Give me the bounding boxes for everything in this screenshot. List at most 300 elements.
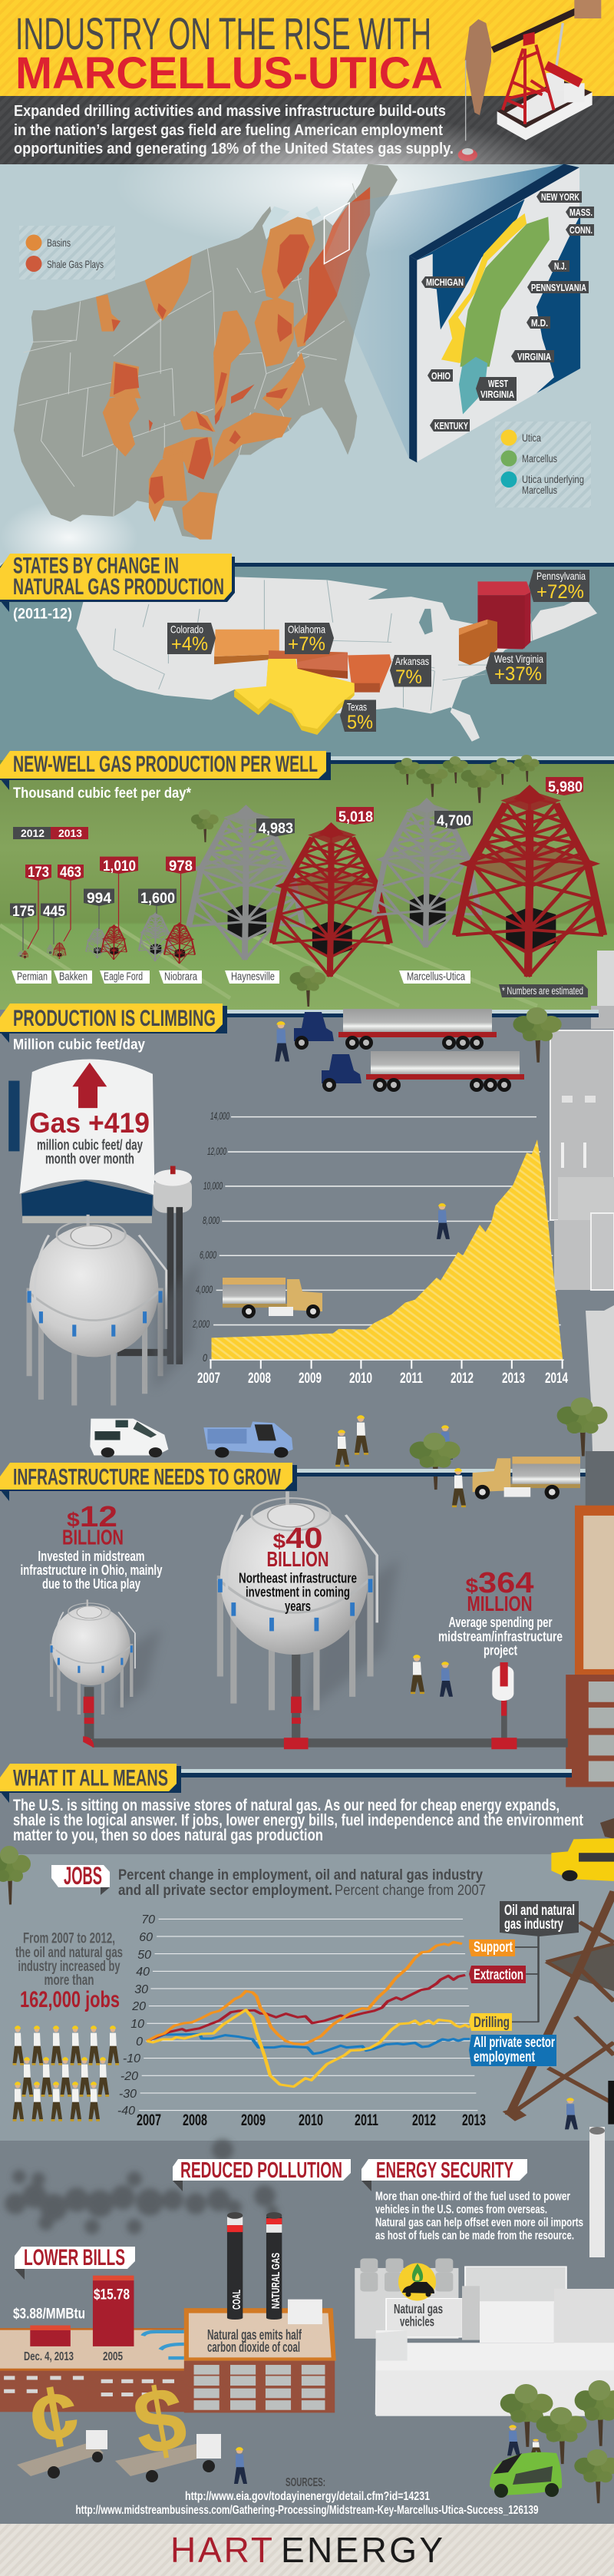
chart year labels: 2008: [183, 2111, 207, 2129]
white column: stack: [589, 2127, 605, 2257]
note: numbers are estimated: [499, 984, 588, 997]
inset: Utica underlying Marcellus: [459, 357, 487, 415]
tag: Pennsylvania +72%: [529, 570, 589, 603]
chart year labels: 2012: [412, 2111, 436, 2129]
chart axis labels: 10,000: [203, 1179, 223, 1192]
legend: basins and shale plays: Shale Gas Plays: [47, 258, 104, 270]
shelter: navy base: [21, 1181, 153, 1218]
chart axis labels: 50: [137, 1949, 151, 1962]
tag: Colorado +4%: Colorado: [170, 623, 203, 636]
inset place labels: [421, 191, 594, 432]
label: jobs: [51, 1862, 110, 1895]
building: processing plant right side: [550, 1006, 614, 1457]
tag: oil and natural gas industry: [500, 1901, 579, 1936]
series: orange support: [147, 1942, 462, 2045]
tag: Texas 5%: [340, 700, 376, 733]
stat: $40 billion: Northeast infrastructure: [239, 1570, 357, 1586]
chart axis labels: 0: [136, 2035, 143, 2049]
chart axis labels: 6,000: [200, 1248, 216, 1261]
stat: 162,000 jobs: more than: [45, 1973, 94, 1989]
icon group: workers: [13, 2025, 119, 2121]
stat: $12 billion: $12: [67, 1501, 117, 1533]
building corner on grass: [597, 951, 614, 1010]
chart year labels: 2011: [400, 1371, 423, 1387]
note: numbers are estimated: * Numbers are estimated: [502, 985, 583, 997]
name labels: gas plays: Marcellus-Utica: [407, 971, 466, 983]
tag: oil and natural gas industry: gas industry: [504, 1916, 563, 1933]
chart year labels: 2008: [248, 1371, 271, 1387]
stat: $40 billion: $40: [273, 1523, 322, 1555]
factory note: Natural gas emits half: [207, 2327, 302, 2343]
tag: Oklahoma +7%: Oklahoma: [288, 623, 325, 636]
worker on chart: [437, 1203, 450, 1239]
icon: natural gas vehicle badge: [398, 2264, 436, 2300]
section rule: states: [230, 563, 614, 567]
chart axis labels: 70: [141, 1913, 155, 1926]
name labels: gas plays: Permian: [17, 971, 48, 983]
legend: inset: Marcellus: [522, 484, 557, 496]
block: Arkansas: [348, 654, 391, 693]
header: yellow title band: [0, 0, 614, 96]
shelter: white roof: [20, 1060, 155, 1195]
value tags: well production: 4,983: [259, 821, 293, 837]
chart year labels: 2012: [451, 1371, 474, 1387]
inset place labels: M.D.: [531, 317, 548, 329]
series: yellow drilling: [147, 2010, 470, 2087]
bill labels: $15.78: [94, 2287, 130, 2303]
tag: oil and natural gas industry: Oil and natural: [504, 1903, 575, 1919]
trees on lot: [410, 1397, 608, 1490]
section rule: production: [227, 1010, 599, 1017]
tag: Extraction: [469, 1966, 526, 1983]
tank: $12 billion: [51, 1599, 135, 1715]
stat: 162,000 jobs: the oil and natural gas: [15, 1945, 123, 1961]
map: states change in gas production: [76, 577, 597, 742]
derrick: Marcellus-Utica 2013: [456, 785, 603, 977]
legend: years: [13, 827, 88, 839]
shelter: equipment column: [8, 1081, 20, 1151]
chart axis labels: 10: [130, 2018, 144, 2031]
grass road markings: [0, 925, 537, 1006]
banner: infrastructure needs to grow: INFRASTRUCTURE NEEDS TO GROW: [13, 1465, 281, 1490]
icon: pump jack: [458, 0, 601, 161]
paragraph: what it all means: [13, 1797, 583, 1844]
inset: Marcellus area: [460, 217, 550, 367]
block: Colorado: [214, 630, 279, 664]
stat: $364 million: midstream/infrastructure: [438, 1629, 563, 1645]
people near car: [507, 2425, 542, 2455]
derrick: Permian 2012: [18, 951, 24, 957]
label: jobs: JOBS: [64, 1862, 102, 1890]
map: US land: [14, 164, 398, 540]
tag: West Virginia +37%: West Virginia: [494, 653, 543, 665]
stat: $40 billion: investment in coming: [246, 1585, 350, 1600]
legend: years: 2013: [58, 827, 82, 839]
footer logo: Hart Energy: [170, 2530, 443, 2570]
tree: upper left of jobs panel: [0, 1846, 31, 1904]
sources: [75, 2476, 539, 2517]
vehicle: white van: [90, 1419, 168, 1457]
icon: cent truck: [17, 2365, 107, 2478]
inset place labels: VIRGINIA: [480, 389, 514, 400]
heading: percent change: Percent change in employment, oil and natural gas industry: [118, 1867, 483, 1883]
trees lower right: [500, 2380, 614, 2503]
chart axis labels: [117, 1913, 155, 2118]
vehicle: blue pickup: [203, 1421, 293, 1458]
banner: energy security: ENERGY SECURITY: [376, 2158, 513, 2183]
value tags: well production: 5,018: [338, 809, 373, 825]
factory: low wing: [0, 2369, 186, 2412]
inset: Utica area: [441, 213, 527, 363]
chart axis labels: 0: [203, 1351, 207, 1364]
name labels: gas plays: Eagle Ford: [104, 971, 143, 983]
sources: http://www.eia.gov/todayinenergy/detail.cfm?id=14231: [185, 2490, 430, 2503]
footer band: [0, 2524, 614, 2576]
gas plus 419 shelter and plant: [8, 1060, 192, 1364]
value tags: well production: 445: [43, 904, 65, 920]
map: United States with basins and shale plays: [14, 164, 398, 540]
tag: All private sector: [469, 2035, 556, 2066]
inset place labels: NEW YORK: [541, 191, 579, 203]
chart axis labels: 8,000: [203, 1214, 220, 1226]
vehicle: yellow taxi: [551, 1838, 614, 1881]
tag: All private sector: All private sector: [474, 2035, 555, 2051]
banner: states by change: STATES BY CHANGE IN: [13, 554, 179, 579]
building: white plant: [355, 2258, 614, 2416]
stack labels: COAL: [230, 2290, 243, 2310]
derrick: Eagle Ford 2012: [86, 928, 109, 958]
tag: Arkansas 7%: Arkansas: [395, 655, 429, 667]
chart: monthly gas production, area chart: [210, 1117, 564, 1369]
stat: 162,000 jobs: 162,000 jobs: [20, 1987, 120, 2012]
tag: Pennsylvania +72%: Pennsylvania: [536, 570, 586, 582]
tank: $364 million small vessel: [492, 1662, 513, 1701]
chart year labels: 2011: [355, 2111, 378, 2129]
stack labels: NATURAL GAS: [269, 2253, 282, 2309]
map background glow: [0, 115, 576, 576]
tag: Arkansas 7%: [390, 655, 431, 688]
tag: Pennsylvania +72%: +72%: [536, 581, 584, 603]
derrick: Haynesville 2012: [189, 805, 303, 960]
stat: $12 billion: due to the Utica play: [42, 1576, 140, 1592]
stat: $40 billion: years: [285, 1599, 311, 1614]
legend: inset: Utica: [522, 432, 541, 444]
chart year labels: 2014: [545, 1371, 568, 1387]
truck: yellow tanker mirrored: [473, 1457, 580, 1500]
label: natural gas vehicles: vehicles: [400, 2314, 434, 2330]
map: white US outline: [76, 577, 597, 742]
stat: $40 billion: [239, 1523, 357, 1614]
stat: $12 billion: [20, 1501, 163, 1592]
tag: Extraction: Extraction: [474, 1967, 523, 1983]
subtitle: units: Million cubic feet/day: [13, 1037, 145, 1053]
tag: Texas 5%: Texas: [347, 700, 367, 713]
derrick: Niobrara 2012: [139, 912, 172, 961]
chart axis labels: 20: [131, 2000, 146, 2013]
banner: what it all means: [0, 1764, 181, 1803]
banner: states by change: [0, 554, 235, 612]
name labels: gas plays: [12, 971, 470, 984]
chart axis labels: 2,000: [192, 1318, 210, 1330]
value tags: well production: 463: [60, 865, 81, 881]
inset place labels: CONN.: [569, 224, 593, 236]
tower: brown derrick on right: [503, 1891, 614, 2125]
chart axis labels: 60: [139, 1931, 153, 1944]
bill labels: $3.88/MMBtu: [13, 2306, 85, 2322]
section rule: new-well production: [326, 756, 614, 764]
value tags: well production: 978: [169, 858, 193, 875]
tag: West Virginia +37%: +37%: [494, 663, 542, 685]
sign: Gas +419: [29, 1107, 150, 1167]
building: brick factory with stacks: [0, 2212, 336, 2412]
pipes: [170, 1207, 180, 1364]
banner: reduced pollution: REDUCED POLLUTION: [180, 2158, 342, 2183]
derrick: Eagle Ford 2013: [101, 924, 127, 960]
name labels: gas plays: Haynesville: [231, 971, 275, 983]
chart year labels: [197, 1371, 568, 1387]
stat: 162,000 jobs: industry increased by: [18, 1959, 120, 1975]
block: Pennsylvania: [477, 581, 530, 650]
map: shale gas plays: [111, 187, 370, 504]
bill labels: 2005: [103, 2350, 123, 2363]
bar: 2005 price: [93, 2276, 134, 2346]
icon: cent truck: ¢: [22, 2365, 86, 2468]
block: West Virginia: [459, 620, 497, 665]
chart year labels: 2009: [299, 1371, 322, 1387]
worker beneath tower: [565, 2098, 578, 2129]
chart axis labels: -20: [120, 2070, 138, 2083]
banner: new-well gas production: [0, 751, 331, 790]
worker in red vest: [275, 1021, 289, 1062]
smoke: [5, 2139, 279, 2234]
derrick: Bakken 2013: [53, 942, 66, 959]
tag: Drilling: Drilling: [474, 2015, 510, 2031]
icon: dollar truck: [115, 2367, 221, 2482]
footer logo: Hart Energy: HART: [170, 2530, 272, 2570]
chart axis labels: 14,000: [210, 1109, 229, 1122]
subtitle: units: Thousand cubic feet per day*: [13, 785, 192, 802]
derrick: Permian 2013: [21, 951, 28, 959]
chart axis labels: [192, 1109, 229, 1364]
chart year labels: 2009: [241, 2111, 266, 2129]
inset place labels: N.J.: [554, 260, 566, 272]
chart axis labels: 30: [134, 1983, 148, 1996]
intro text: [14, 103, 454, 157]
series: blue all private: [147, 2034, 470, 2054]
chart year labels: 2010: [349, 1371, 372, 1387]
arrow: increase: [72, 1063, 107, 1108]
intro text: Expanded drilling activities and massive infrastructure build-outs: [14, 103, 446, 120]
stat: 162,000 jobs: [15, 1931, 123, 2012]
derrick: Niobrara 2013: [164, 922, 195, 964]
small white tank: [154, 1166, 192, 1213]
legend: years: 2012: [21, 827, 45, 839]
banner: what it all means: WHAT IT ALL MEANS: [13, 1766, 168, 1791]
tag: West Virginia +37%: [486, 653, 546, 685]
map: basins: [96, 217, 315, 540]
bar: Dec 4 2013 price: [30, 2326, 71, 2346]
value tags: well production: 175: [12, 904, 35, 920]
stack: natural gas: [266, 2212, 282, 2320]
stat: $12 billion: Invested in midstream: [38, 1549, 144, 1564]
heading: percent change: Percent change from 2007: [335, 1883, 486, 1899]
intro text: in the nation’s largest gas field are fueling American employment: [14, 122, 443, 139]
inset place labels: WEST: [488, 378, 508, 389]
chart axis labels: 40: [136, 1966, 150, 1979]
tag: Texas 5%: 5%: [347, 712, 373, 733]
footer logo: Hart Energy: ENERGY: [281, 2530, 443, 2570]
banner: energy security: [361, 2158, 527, 2191]
inset place labels: MASS.: [569, 207, 593, 218]
subtitle: years: (2011-12): [13, 607, 72, 623]
legend: basins and shale plays: [19, 226, 115, 279]
factory: blue pipes: [143, 2332, 184, 2358]
chart: employment line chart: [139, 1919, 539, 2111]
value tags: well production: 4,700: [437, 813, 471, 829]
stat: $364 million: project: [484, 1643, 517, 1658]
inset place labels: MICHIGAN: [426, 276, 464, 288]
derrick: Bakken 2012: [47, 944, 54, 955]
tag: All private sector: employment: [474, 2049, 535, 2065]
banner: lower bills: [15, 2245, 135, 2280]
chart year labels: 2007: [137, 2111, 161, 2129]
name labels: gas plays: Bakken: [59, 971, 87, 983]
paragraph: what it all means: matter to you, then so does natural gas production: [13, 1827, 323, 1844]
chart year labels: [137, 2111, 486, 2129]
section rule: infrastructure: [296, 1469, 606, 1476]
inset map: Marcellus-Utica region: [409, 164, 580, 462]
worker near trucks: [234, 2447, 247, 2484]
stack labels: [230, 2253, 282, 2310]
tag: Support: Support: [474, 1939, 513, 1956]
tag: Colorado +4%: [167, 623, 216, 655]
truck: tanker 1: [294, 1009, 497, 1050]
tag: Support: [469, 1939, 515, 1956]
icon: dollar truck: $: [126, 2367, 193, 2475]
building: brick block with roof: [566, 1451, 614, 1787]
banner: lower bills: LOWER BILLS: [24, 2245, 125, 2270]
chart year labels: 2013: [502, 1371, 525, 1387]
chart axis labels: -40: [117, 2105, 135, 2118]
header: dark intro band: [0, 96, 614, 164]
heading: percent change: [118, 1867, 486, 1899]
chart year labels: 2007: [197, 1371, 220, 1387]
sources: SOURCES:: [286, 2476, 325, 2489]
trees behind derricks: [191, 755, 540, 1007]
block: Texas: [234, 659, 355, 735]
factory: main block: [184, 2361, 335, 2412]
sign: Gas +419: Gas +419: [29, 1107, 150, 1139]
vehicle: green car: [490, 2452, 562, 2498]
text: energy security: vehicles in the U.S. comes from overseas.: [375, 2204, 547, 2217]
banner: states by change: NATURAL GAS PRODUCTION: [13, 574, 224, 600]
banner: reduced pollution: [173, 2158, 351, 2191]
people on lot: [335, 1415, 453, 1467]
chart axis labels: -30: [119, 2088, 137, 2101]
factory note: carbon dioxide of coal: [207, 2340, 300, 2355]
sign: Gas +419: million cubic feet/ day: [37, 1138, 143, 1153]
stat: 162,000 jobs: From 2007 to 2012,: [23, 1931, 115, 1947]
tower top fragment above the jobs panel: [600, 1818, 614, 1839]
stat: $12 billion: infrastructure in Ohio, mainly: [20, 1562, 163, 1578]
heading: percent change: and all private sector employment.: [118, 1883, 332, 1899]
banner: production is climbing: PRODUCTION IS CLIMBING: [13, 1006, 216, 1031]
tag: Colorado +4%: +4%: [171, 633, 208, 655]
label: natural gas vehicles: [394, 2301, 443, 2330]
truck: tanker 2: [322, 1051, 524, 1092]
derrick: Marcellus-Utica 2012: [374, 798, 480, 947]
inset place labels: OHIO: [431, 370, 451, 382]
stat: $12 billion: BILLION: [62, 1525, 124, 1549]
chart axis labels: 12,000: [207, 1145, 226, 1157]
banner: new-well gas production: NEW-WELL GAS PRODUCTION PER WELL: [13, 752, 318, 777]
chart year labels: 2013: [462, 2111, 486, 2129]
worker by truck: [452, 1468, 466, 1507]
value tags: well production: [10, 777, 583, 920]
intro text: opportunities and generating 18% of the United States gas supply.: [14, 141, 454, 157]
stat: $40 billion: BILLION: [267, 1547, 328, 1571]
inset place labels: KENTUKY: [434, 420, 468, 432]
tag: Arkansas 7%: 7%: [395, 666, 422, 688]
stat: $364 million: [438, 1567, 563, 1658]
legend: inset: Marcellus: [522, 452, 557, 465]
chart year labels: 2010: [299, 2111, 323, 2129]
factory note: [207, 2327, 302, 2355]
section rule: what it means: [180, 1769, 572, 1777]
chart axis labels: 4,000: [196, 1283, 213, 1295]
tag: Drilling: [469, 2013, 512, 2031]
inset place labels: PENNSYLVANIA: [531, 282, 586, 293]
name labels: gas plays: Niobrara: [164, 971, 198, 983]
inset place labels: VIRGINIA: [517, 351, 551, 362]
series: red extraction: [147, 1975, 465, 2041]
tank: main production sphere: [28, 1215, 167, 1406]
legend: inset: Utica underlying: [522, 473, 584, 485]
value tags: well production: 1,600: [140, 891, 175, 907]
pipeline: connecting the tanks: [83, 1652, 568, 1749]
title: MARCELLUS-UTICA: [15, 48, 443, 98]
value tags: well production: 1,010: [103, 858, 136, 875]
value tags: well production: 5,980: [548, 779, 583, 795]
stat: $364 million: MILLION: [467, 1592, 533, 1615]
tree by tankers: [513, 1007, 562, 1063]
tag: Oklahoma +7%: +7%: [288, 633, 325, 655]
value tags: well production: 994: [87, 891, 111, 907]
workers near vessel: [411, 1655, 453, 1697]
stack: coal: [227, 2212, 243, 2320]
banner: production is climbing: [0, 1004, 227, 1043]
sign: Gas +419: month over month: [45, 1152, 134, 1167]
chart axis labels: -10: [123, 2052, 140, 2065]
ground shadows of the tanks: [115, 1259, 399, 1712]
callout: beam from map to inset: [323, 164, 564, 458]
derrick: Haynesville 2013: [272, 822, 390, 977]
bill labels: [13, 2287, 130, 2363]
block: Oklahoma: [269, 650, 348, 679]
leader lines for small derricks: [23, 874, 181, 951]
text: energy security: [375, 2191, 583, 2242]
label: natural gas vehicles: Natural gas: [394, 2301, 443, 2316]
legend: basins and shale plays: Basins: [47, 236, 71, 249]
stat: $364 million: Average spending per: [448, 1615, 553, 1630]
bill labels: Dec. 4, 2013: [24, 2350, 74, 2363]
value tags: well production: 173: [28, 865, 49, 881]
truck: yellow tanker on chart: [223, 1278, 322, 1318]
stat: $364 million: $364: [465, 1567, 534, 1599]
banner: infrastructure needs to grow: [0, 1463, 297, 1501]
legend: inset: [495, 422, 591, 508]
title: [15, 9, 443, 98]
